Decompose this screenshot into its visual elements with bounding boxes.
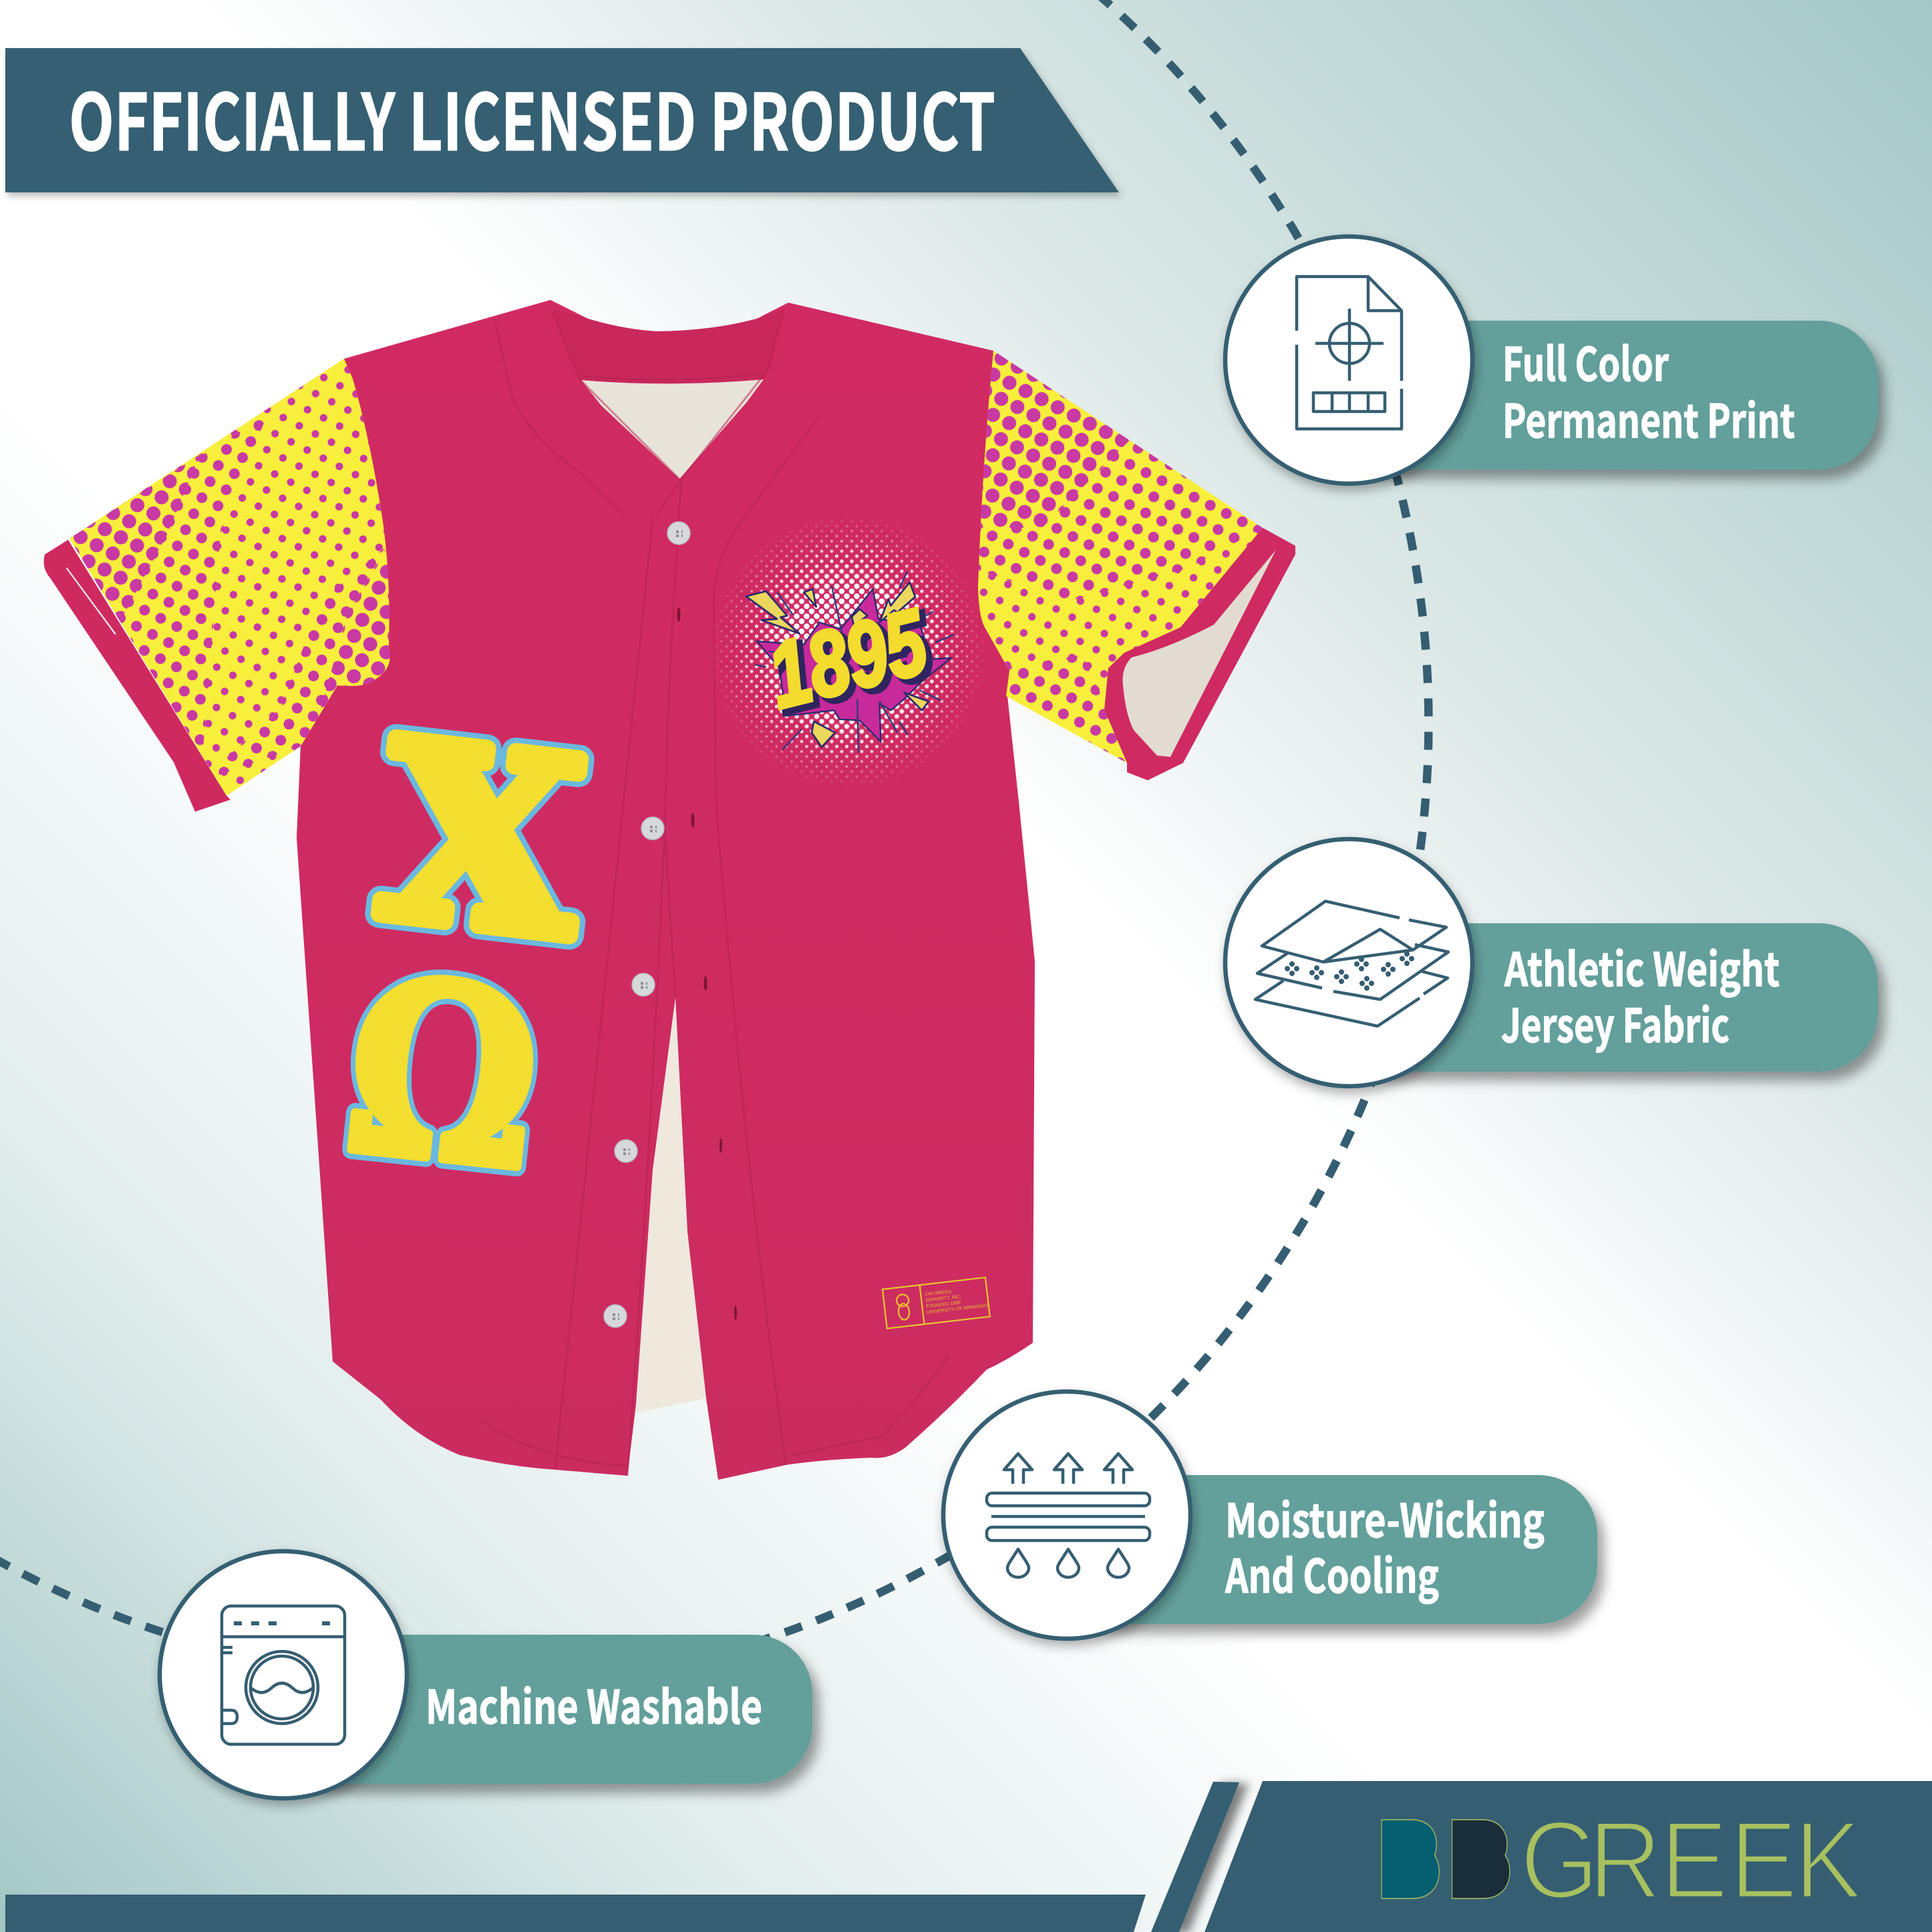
footer bar left — [5, 1895, 1146, 1932]
icon: print file — [1297, 277, 1402, 429]
feature: athletic weight jersey fabric — [1225, 839, 1878, 1086]
burst star — [757, 589, 951, 742]
greek letter chi: Χ — [369, 687, 597, 993]
icon circle — [160, 1551, 407, 1798]
burst lines — [755, 571, 954, 753]
tag text: CHI OMEGA — [925, 1289, 952, 1297]
buttons — [604, 522, 690, 1327]
collar opening — [581, 379, 764, 479]
logo: BB outline: BB — [1386, 1812, 1504, 1906]
1895 shadow: 1895 — [764, 594, 943, 732]
feature: full color permanent print — [1225, 236, 1878, 484]
jersey seams — [481, 309, 949, 1476]
right cuff interior — [1123, 550, 1276, 757]
jersey inner back fabric — [636, 998, 706, 1413]
hem tag — [882, 1277, 990, 1329]
label: Machine Washable — [426, 1670, 762, 1737]
icon circle — [943, 1392, 1190, 1639]
label: And Cooling — [1225, 1539, 1439, 1606]
pill — [1336, 923, 1878, 1072]
icon: fabric layers — [1255, 901, 1448, 1026]
logo: BB fill: B — [1456, 1812, 1504, 1906]
left sleeve with halftone — [69, 359, 390, 796]
label: Jersey Fabric — [1501, 989, 1730, 1056]
logo: GREEK: GREEK — [1520, 1798, 1862, 1921]
pill — [271, 1635, 812, 1784]
right sleeve with halftone — [978, 351, 1263, 763]
icon: washing machine — [222, 1606, 345, 1744]
feature: machine washable — [160, 1551, 812, 1798]
dashed connector ring — [0, 0, 1428, 1650]
1895 numerals: 1895 — [759, 590, 937, 728]
left cuff opening — [66, 567, 116, 635]
footer logo panel — [1204, 1781, 1932, 1932]
label: Full Color — [1502, 327, 1669, 394]
heading text: OFFICIALLY LICENSED PRODUCT — [69, 59, 995, 173]
label: Permanent Print — [1502, 384, 1795, 451]
1895 comic burst graphic — [746, 571, 954, 753]
jersey body — [297, 300, 1035, 1480]
greek letter omega: Ω — [335, 924, 552, 1224]
label: Moisture-Wicking — [1225, 1484, 1545, 1551]
icon: moisture layers — [987, 1454, 1150, 1577]
tag text: SORORITY, INC. — [925, 1295, 961, 1303]
pill — [1056, 1475, 1597, 1624]
footer slanted stripe — [1151, 1782, 1239, 1932]
owl icon — [896, 1294, 911, 1320]
bolts and diamonds — [746, 583, 929, 747]
halftone chest burst — [711, 514, 985, 788]
back collar band — [552, 309, 784, 385]
left sleeve cuff — [44, 540, 230, 812]
tag text: FOUNDED 1895 — [926, 1301, 961, 1309]
greek letter omega: Ω — [335, 924, 552, 1224]
tag text: UNIVERSITY OF ARKANSAS — [927, 1303, 989, 1315]
right sleeve cuff — [1104, 528, 1295, 780]
button holes — [677, 607, 737, 1320]
feature: moisture-wicking and cooling — [943, 1392, 1597, 1639]
pill — [1336, 321, 1878, 470]
heading banner — [5, 48, 1119, 192]
greek letter chi: Χ — [369, 687, 597, 993]
logo: BB fill: B — [1386, 1812, 1434, 1906]
icon circle — [1225, 839, 1472, 1086]
icon circle — [1225, 236, 1472, 484]
label: Athletic Weight — [1504, 933, 1780, 999]
jersey — [44, 300, 1295, 1480]
